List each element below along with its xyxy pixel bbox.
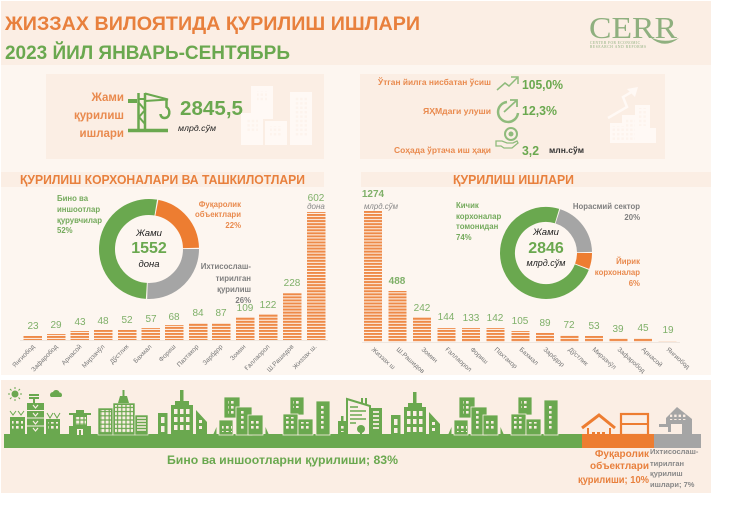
bar chart: works by district: 45 (637, 323, 649, 334)
subtitle: 2023 ЙИЛ ЯНВАРЬ-СЕНТЯБРЬ (5, 42, 290, 64)
indicator: growth: Ўтган йилга нисбатан ўсиш (377, 76, 491, 87)
bar chart: enterprises by district: 57 (145, 314, 157, 325)
label: buildings share: 52% (57, 226, 73, 235)
label: civil objects share (195, 200, 241, 230)
bar chart: works by district: 142 (487, 313, 504, 324)
bar chart: enterprises by district: 52 (121, 315, 133, 326)
bar chart: enterprises by district: Зомин (229, 343, 248, 362)
illustration: specialized works (659, 407, 692, 434)
panel: total construction (46, 74, 324, 159)
label: buildings share: қурувчилар (57, 216, 102, 225)
bar chart: enterprises by district: Зафаробод (30, 343, 60, 373)
label: civil objects share: Фуқаролик (199, 200, 241, 209)
indicator: GDP share: 12,3% (522, 103, 557, 118)
donut chart: construction works (496, 203, 596, 303)
bar chart: enterprises by district: 602 (308, 193, 325, 204)
bar chart: works by district: 144 (438, 312, 455, 323)
illustration: green tower cluster 2 repeated (448, 397, 504, 435)
label: specialized share (201, 262, 251, 305)
bar chart: enterprises by district: Зарбдор (201, 343, 225, 367)
label: total works (74, 92, 124, 140)
indicator: GDP share (423, 100, 557, 122)
label: buildings share: иншоотлар (57, 205, 100, 214)
bar chart: works by district: 242 (414, 303, 431, 314)
indicator: GDP share: ЯҲМдаги улуши (423, 106, 491, 116)
bar chart: works by district: 53 (588, 321, 600, 332)
label: civil objects share: объектлари (195, 210, 241, 219)
heading: construction works (361, 172, 711, 187)
label: specialized share: қурилиш (217, 285, 251, 294)
bar chart: enterprises by district: 48 (97, 316, 109, 327)
bar chart: enterprises by district: Арнасой (60, 343, 84, 367)
bar chart: enterprises by district: 29 (50, 320, 62, 331)
label: buildings share (57, 194, 102, 235)
bar chart: works by district: 19 (662, 325, 674, 336)
bar chart: works by district: 488 (389, 276, 406, 287)
bar chart: works by district: 105 (512, 316, 529, 327)
icon: buildings (241, 86, 312, 145)
text: civil objects 10%: Фуқаролик (595, 449, 650, 460)
bar chart: works by district: Дўстлик (567, 346, 590, 368)
bar chart: works by district: 133 (463, 313, 480, 324)
bar chart: enterprises by district: 23 (27, 321, 39, 332)
bar chart: enterprises by district: Ш.Рашидов (266, 343, 296, 374)
bar chart: works by district: 72 (563, 320, 575, 331)
bar chart: works by district: Фориш (469, 346, 489, 366)
illustration: green tower cluster 2 (213, 397, 269, 435)
indicator: growth: 105,0% (522, 77, 563, 92)
bar chart: works by district: Пахтакор (493, 346, 519, 371)
illustration: green buildings left (10, 394, 91, 435)
value: 2845,5: 2845,5 (180, 98, 243, 120)
bar chart: enterprises by district: дона (307, 202, 325, 211)
indicator: average wage: млн.сўм (549, 145, 584, 155)
title: ЖИЗЗАХ ВИЛОЯТИДА ҚУРИЛИШ ИШЛАРИ (4, 14, 420, 35)
donut chart: enterprises: 1552 (131, 240, 167, 257)
donut chart: enterprises (100, 200, 198, 298)
bar chart: enterprises by district: Янгиобод (11, 343, 37, 369)
bar chart: enterprises by district: Жиззах ш. (292, 343, 319, 371)
label: informal sector share: 20% (624, 213, 640, 222)
bar chart: enterprises by district: 87 (215, 308, 227, 319)
illustration: green tower trio (98, 390, 148, 435)
icon: sun (8, 387, 22, 401)
label: total works: ишлари (80, 128, 124, 140)
label: specialized share: Ихтисослаш- (201, 262, 251, 271)
bar chart: works by district: Бахмал (518, 346, 540, 367)
icon: growing buildings (608, 87, 656, 143)
bar chart: enterprises by district: 109 (237, 303, 254, 314)
text: buildings 83%: Бино ва иншоотларни қурилиши; 83% (167, 453, 398, 467)
ground bar: specialized 7% (654, 434, 701, 448)
text: civil objects 10% (578, 449, 650, 486)
label: large enterprises share: корхоналар (595, 268, 640, 277)
bar chart: enterprises by district: Ғаллаорол (244, 343, 272, 372)
bar chart: works by district: 1274 (362, 189, 385, 200)
label: large enterprises share (595, 257, 640, 288)
label: buildings share: Бино ва (57, 194, 89, 203)
text: specialized 7% (650, 447, 699, 489)
bar chart: works by district: Ғаллаорол (444, 346, 473, 374)
label: informal sector share: Норасмий сектор (573, 202, 640, 211)
bar chart: enterprises by district: 43 (74, 317, 86, 328)
panel: key indicators (360, 74, 665, 159)
unit: млрд.сўм (178, 123, 216, 133)
text: specialized 7%: тирилган (650, 459, 684, 468)
label: large enterprises share: 6% (629, 279, 640, 288)
label: small enterprises share: 74% (456, 233, 472, 242)
label: informal sector share (573, 202, 640, 222)
label: small enterprises share: корхоналар (456, 212, 501, 221)
donut chart: construction works: млрд.сўм (527, 258, 565, 268)
text: civil objects 10%: қурилиши; 10% (578, 475, 649, 486)
bar chart: works by district: Арнасой (640, 346, 664, 369)
bar chart: enterprises by district: 228 (284, 278, 301, 289)
illustration: green tower cluster 1 repeated (391, 392, 440, 435)
indicator: growth (377, 76, 563, 92)
illustration: civil objects (582, 414, 648, 435)
bar chart: works by district (362, 189, 692, 375)
bar chart: works by district: Янгиобод (665, 346, 692, 371)
donut chart: construction works: Жами (532, 227, 560, 238)
indicator: average wage: 3,2 (522, 143, 539, 158)
label: small enterprises share: томонидан (456, 222, 499, 231)
icon: crane (128, 93, 169, 130)
bar chart: enterprises by district: 84 (192, 308, 204, 319)
indicator: average wage (394, 128, 584, 158)
illustration: green tower cluster 1 (158, 390, 207, 435)
bar chart: works by district: млрд.сўм (364, 201, 398, 211)
label: total works: қурилиш (74, 110, 124, 122)
ground bar: civil objects 10% (582, 434, 654, 448)
bar chart: works by district: Зафаробод (616, 346, 647, 375)
label: civil objects share: 22% (225, 221, 241, 230)
illustration: green tower cluster 3 repeated (511, 397, 558, 435)
label: small enterprises share (456, 201, 501, 242)
bar chart: enterprises by district: Мирзачўл (80, 343, 107, 370)
donut chart: construction works: 2846 (528, 240, 564, 257)
heading: enterprises: ҚУРИЛИШ КОРХОНАЛАРИ ВА ТАШКИЛОТЛАРИ (20, 173, 305, 187)
bar chart: enterprises by district: Бахмал (132, 343, 154, 365)
bar chart: enterprises by district (11, 193, 328, 374)
bar chart: works by district: 89 (539, 318, 551, 329)
donut chart: enterprises: Жами (135, 228, 163, 239)
bar chart: enterprises by district: Фориш (158, 344, 177, 364)
label: specialized share: тирилган (216, 274, 251, 283)
logo: CERR: CERR (589, 10, 677, 45)
donut chart: enterprises: дона (138, 259, 160, 270)
label: total works: Жами (90, 92, 124, 104)
ground bar: buildings 83% (4, 434, 582, 448)
bar chart: works by district: Зомин (420, 346, 439, 365)
bar chart: enterprises by district: Дўстлик (108, 343, 131, 366)
bar chart: works by district: Ш.Рашидов (395, 346, 426, 375)
header band (1, 1, 711, 65)
text: specialized 7%: ишлари; 7% (650, 480, 695, 489)
bar chart: enterprises by district: 68 (168, 312, 180, 323)
label: specialized share: 26% (235, 296, 251, 305)
text: civil objects 10%: объектлари (590, 460, 649, 472)
bar chart: works by district: 39 (612, 324, 624, 335)
logo: CERR: CENTER FOR ECONOMIC (590, 41, 641, 45)
text: specialized 7%: қурилиш (650, 469, 683, 478)
heading: construction works: ҚУРИЛИШ ИШЛАРИ (453, 173, 574, 187)
bar chart: works by district: Жиззах ш (370, 346, 396, 371)
indicator: average wage: Соҳада ўртача иш ҳақи (394, 145, 491, 155)
bar chart: works by district: Мирзачўл (591, 346, 618, 371)
bar chart: enterprises by district: Пахтакор (176, 343, 201, 369)
label: small enterprises share: Кичик (456, 201, 479, 210)
label: large enterprises share: Йирик (616, 257, 640, 266)
icon: cloud (50, 390, 62, 397)
bar chart: enterprises by district: 122 (260, 300, 277, 311)
panel: construction structure (1, 380, 711, 493)
illustration: green office building (338, 398, 382, 435)
illustration: green tower cluster 3 (283, 397, 330, 435)
text: specialized 7%: Ихтисослаш- (650, 447, 699, 456)
bar chart: works by district: Зарбдор (542, 346, 566, 369)
logo: CERR: RESEARCH AND REFORMS (590, 45, 646, 49)
